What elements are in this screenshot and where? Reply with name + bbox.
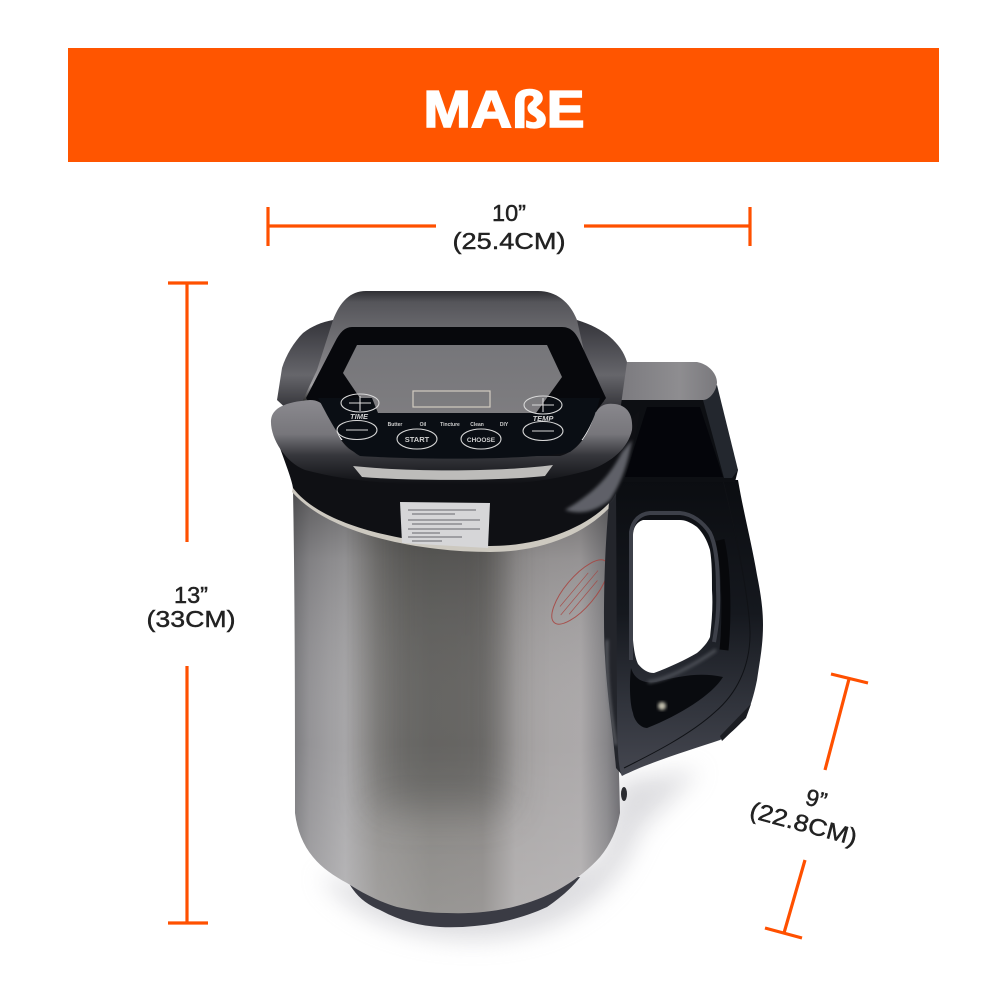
handle hub backing bbox=[600, 398, 738, 482]
handle hub bbox=[625, 407, 723, 477]
height dimension bbox=[146, 283, 236, 923]
height dimension: (33CM) bbox=[146, 606, 236, 632]
panel labels: TEMP bbox=[533, 414, 554, 423]
silver ring bbox=[292, 482, 612, 552]
soup maker product bbox=[271, 291, 763, 940]
floor shadow bbox=[320, 770, 700, 940]
panel labels: CHOOSE bbox=[467, 437, 496, 444]
carry grip bbox=[302, 291, 604, 402]
width dimension bbox=[268, 200, 750, 254]
grip black frame bbox=[306, 327, 606, 420]
button on body bbox=[621, 787, 627, 801]
lid front bbox=[271, 400, 632, 485]
panel labels: Butter bbox=[388, 422, 402, 428]
body side reflection bbox=[604, 482, 622, 775]
top slab of handle bbox=[592, 362, 717, 400]
depth dimension bbox=[747, 674, 868, 938]
panel labels: DIY bbox=[500, 422, 509, 428]
warning label bbox=[400, 502, 490, 548]
depth dimension: 9” bbox=[803, 784, 830, 814]
panel labels: Clean bbox=[470, 422, 484, 428]
depth dimension: (22.8CM) bbox=[747, 797, 860, 850]
width dimension: (25.4CM) bbox=[452, 228, 566, 254]
base bbox=[350, 877, 580, 927]
handle specular spot bbox=[658, 702, 666, 710]
handle bbox=[616, 480, 763, 776]
title: MAßE bbox=[424, 81, 584, 139]
handle seam bbox=[624, 480, 750, 768]
warning stamp bbox=[551, 559, 606, 625]
rear lid bbox=[277, 320, 627, 412]
panel labels: TIME bbox=[350, 412, 369, 421]
width dimension: 10” bbox=[492, 200, 526, 226]
height dimension: 13” bbox=[174, 582, 208, 608]
control panel bbox=[318, 391, 600, 459]
panel labels: Oil bbox=[420, 422, 427, 428]
glass panel top bbox=[343, 345, 562, 413]
panel labels: START bbox=[405, 435, 430, 444]
dark collar bbox=[277, 410, 640, 546]
display bbox=[413, 391, 490, 407]
lid front reflection bbox=[353, 465, 553, 480]
handle grip pocket bbox=[630, 668, 723, 728]
panel labels: Tincture bbox=[440, 422, 460, 428]
touch buttons bbox=[337, 394, 563, 449]
title banner bbox=[68, 48, 939, 162]
panel labels bbox=[350, 412, 554, 444]
foot bbox=[720, 704, 751, 741]
stainless body bbox=[285, 480, 630, 920]
handle hub side bbox=[703, 385, 738, 478]
hole inner rim bbox=[631, 513, 718, 660]
